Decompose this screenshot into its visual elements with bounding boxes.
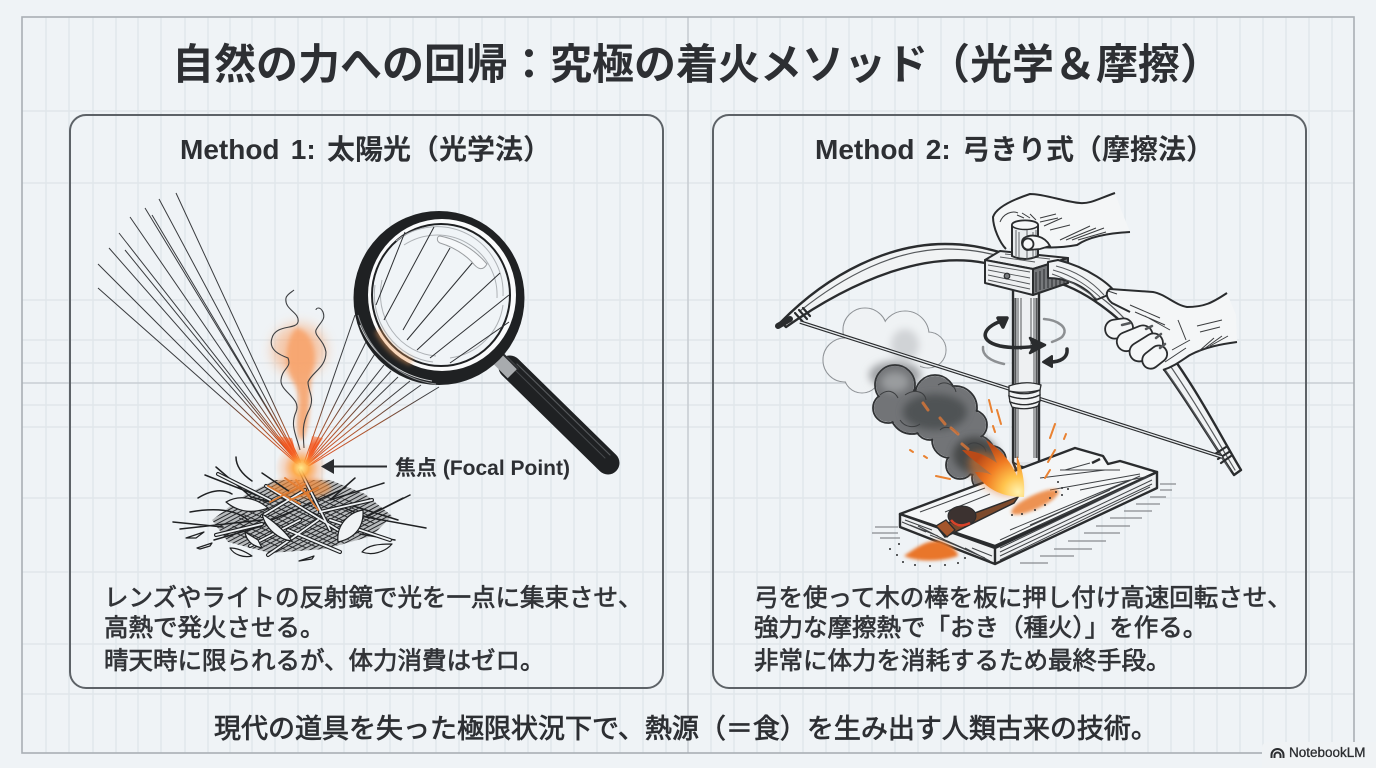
footer message: 現代の道具を失った極限状況下で、熱源（＝食）を生み出す人類古来の技術。 xyxy=(214,714,1158,744)
panel: method 2 xyxy=(712,114,1307,689)
tinder pile xyxy=(173,457,426,561)
heading: method 1: Method 1: 太陽光（光学法） xyxy=(180,134,551,165)
illustration: magnifier focusing sunlight on tinder xyxy=(98,192,620,562)
handle xyxy=(499,355,610,463)
illustration: bow drill xyxy=(775,192,1242,567)
twigs xyxy=(216,470,390,555)
focal glow xyxy=(275,436,327,494)
body text: method 2: 弓を使って木の棒を板に押し付け高速回転させ、 xyxy=(754,585,1292,612)
lens highlight xyxy=(437,236,487,269)
flame and sparks xyxy=(910,400,1066,504)
wordmark: NotebookLM xyxy=(1289,745,1366,760)
lens rim xyxy=(354,211,524,385)
focal point label: 焦点 (Focal Point) xyxy=(395,457,570,480)
pale smoke xyxy=(823,308,946,393)
hand: top xyxy=(993,193,1130,260)
lens rays xyxy=(376,227,509,363)
NotebookLM badge xyxy=(1262,742,1376,768)
ember groove xyxy=(936,497,1018,537)
body text: method 1: 高熱で発火させる。 xyxy=(104,615,324,642)
rope wrap xyxy=(1009,383,1041,409)
body text: method 1: 晴天時に限られるが、体力消費はゼロ。 xyxy=(104,648,545,675)
bow xyxy=(778,244,1241,475)
bow string xyxy=(800,322,1222,457)
light rays: from lens xyxy=(304,315,439,466)
body text: method 2 xyxy=(754,584,1292,675)
smoke xyxy=(271,290,326,450)
hand: right xyxy=(1104,289,1237,372)
magnifying glass xyxy=(354,211,610,463)
panel: method 1 xyxy=(69,114,664,689)
body text: method 2: 非常に体力を消耗するため最終手段。 xyxy=(754,648,1170,675)
body text: method 2: 強力な摩擦熱で「おき（種火）」を作る。 xyxy=(754,615,1207,642)
title: 自然の力への回帰：究極の着火メソッド（光学＆摩擦） xyxy=(172,41,1222,88)
orange dust xyxy=(889,481,1069,567)
dark smoke xyxy=(873,365,1006,491)
arrow to focal point xyxy=(321,459,387,474)
icon: NotebookLM logo xyxy=(1270,748,1284,758)
leaves xyxy=(186,498,392,561)
light rays: incoming left xyxy=(98,193,301,464)
spindle xyxy=(1009,290,1041,497)
fireboard xyxy=(900,448,1157,564)
heading: method 2: Method 2: 弓きり式（摩擦法） xyxy=(815,134,1214,165)
rotation arrows xyxy=(983,318,1067,367)
body text: method 1 xyxy=(104,584,643,675)
wooden bearing block xyxy=(985,251,1115,300)
body text: method 1: レンズやライトの反射鏡で光を一点に集束させ、 xyxy=(104,585,643,612)
shadow hatching xyxy=(872,484,1176,563)
